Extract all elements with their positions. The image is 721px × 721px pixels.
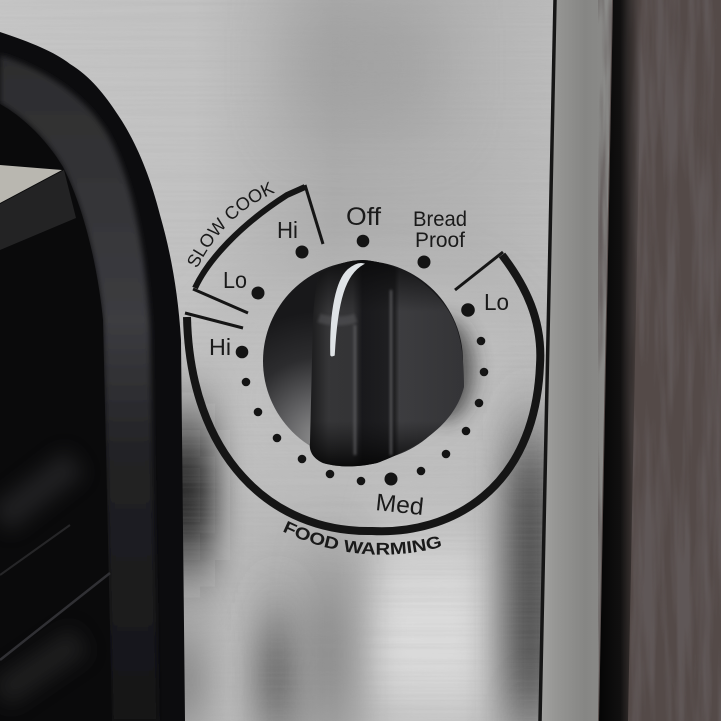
panel: dark wood cabinet [598,0,721,721]
oven door black outer frame [0,32,185,721]
knob [263,260,473,466]
warming range end tick left [185,313,243,328]
label: bread proof: Proof [415,229,465,252]
slow cook end tick right [305,185,323,244]
knob front body [310,260,464,466]
label: slow cook: SLOW COOK [188,182,275,267]
label: off: Off [346,203,381,231]
knob cast shadow [417,320,473,420]
lower window slats [0,462,110,695]
panel: vertical steel trim strip [540,0,614,721]
warming range end tick right [455,252,503,290]
panel: brushed stainless steel [0,0,556,721]
panel: oven door frame [0,32,185,721]
oven window interior [0,104,112,721]
light rack reflection [0,165,62,203]
label: med: Med [374,489,425,521]
food warming arc [187,255,540,531]
dark rack rail [0,170,76,250]
grip sheen lines [319,290,391,455]
knob dome [263,261,463,461]
label: slow cook hi: Hi [277,217,298,243]
oven door grey bezel [0,55,158,721]
dial: printed ring and labels [183,182,544,555]
label: food warming: FOOD WARMING [283,521,441,555]
slow cook end tick left [193,289,248,313]
label: slow cook lo: Lo [223,267,247,293]
label: bread proof [413,208,467,252]
label: bread proof: Bread [413,208,467,231]
label: warming hi: Hi [209,334,231,360]
slow cook arc [195,187,305,288]
knob pointer line [331,264,363,356]
label: warming lo: Lo [484,289,509,315]
setting dots [236,235,488,486]
